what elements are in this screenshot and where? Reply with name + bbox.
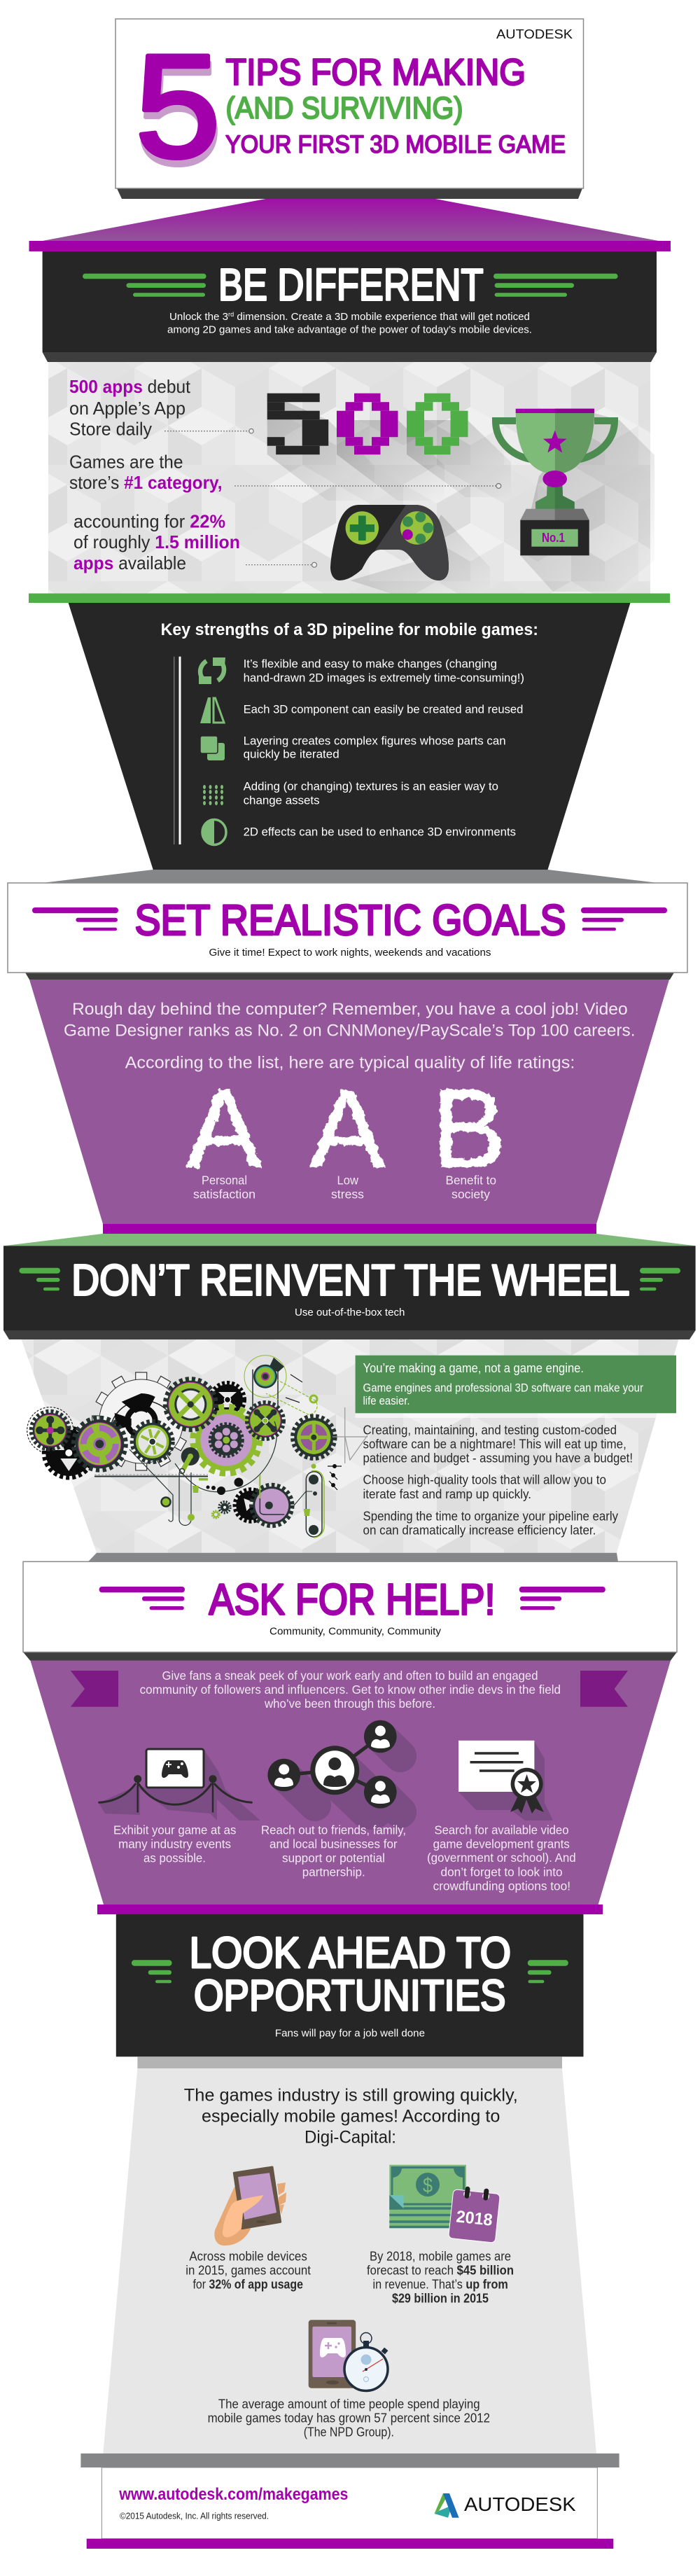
white header box [23,1561,677,1652]
text: reach out: Reach out to friends, family, [261,1823,406,1837]
outlined large gear [92,1372,190,1470]
text: reach out: partnership. [302,1865,365,1879]
crank [179,1447,200,1473]
logo: autodesk: AUTODESK [464,2493,576,2515]
dotted callout lines [164,429,501,567]
icon: hand holding phone [214,2167,286,2246]
dark funnel background [69,603,631,870]
header ledge [25,973,674,980]
intro text: community of followers and influencers. Get to know other indie devs in the field [140,1683,561,1697]
list item 5: 2D effects can be used to enhance 3D environments [244,825,516,838]
gray bar [80,2453,620,2467]
logo: autodesk [434,2493,576,2518]
intro text: dimension. Create a 3D mobile experience that will get noticed [234,311,530,323]
icon: texture dots [203,785,223,805]
heading stripes [132,1960,568,1983]
heading: Key strengths of a 3D pipeline for mobile games: [161,620,538,639]
icon: phone and stopwatch [309,2320,388,2390]
body text: on can dramatically increase efficiency later. [363,1524,596,1538]
panel: app store stats [48,362,654,594]
black gear lower left [44,1428,93,1477]
intro text [167,311,532,335]
text: app usage: in 2015, games account [186,2263,311,2277]
stats text: accounting for 22% [74,510,225,531]
patterned background [48,362,650,594]
purple bar [97,1905,603,1914]
text: grants: game development grants [433,1837,570,1851]
intro text: According to the list, here are typical quality of life ratings: [125,1053,575,1072]
icon: trophy: No.1 [542,531,565,545]
panel: footer [102,2467,597,2539]
icon: exhibit screen [99,1749,260,1820]
title line 3: YOUR FIRST 3D MOBILE GAME [225,130,566,158]
text: play time [208,2397,490,2439]
big lime gear [193,1407,259,1473]
list item 4 [244,780,498,807]
subheading: Use out-of-the-box tech [295,1307,405,1318]
list item 1 [244,657,524,684]
list item 3: quickly be iterated [244,748,340,761]
gear with flower [31,1412,69,1449]
panel: be different header [43,251,657,362]
gray connector [42,870,658,883]
panel: community [30,1661,671,1905]
rating: A personal satisfaction: A [186,1066,262,1191]
icon: layered squares [200,736,225,760]
intro text: rd [228,311,234,318]
panel: look ahead header [116,1914,584,2056]
digit 5 cells [267,394,328,454]
black gear bottom [234,1489,267,1522]
gear X spokes [165,1379,216,1430]
text: reach out [261,1823,406,1879]
text: app usage: for 32% of app usage [193,2277,303,2291]
body text: Choose high-quality tools that will allow you to [363,1473,606,1487]
text: play time: mobile games today has grown 57 percent since 2012 [208,2411,490,2425]
panel: title [115,19,584,199]
gear track details [161,1463,342,1535]
big number 5: 5 [135,24,220,188]
body text: patience and budget - assuming you have a budget! [363,1451,633,1465]
purple bar [29,241,671,251]
heading stripes [99,1587,606,1610]
stats text: on Apple’s App [69,398,186,419]
green bar [29,594,670,603]
list item 4: Adding (or changing) textures is an easier way to [244,780,498,793]
header ledge [4,1330,696,1339]
gear track lines [94,1407,368,1538]
icon: grant certificate [458,1741,553,1820]
body text: Spending the time to organize your pipeline early [363,1510,618,1524]
dark header box [43,251,657,352]
text: revenue: $29 billion in 2015 [392,2291,489,2305]
heading stripes [32,907,667,931]
text: grants [427,1823,576,1893]
text: play time: (The NPD Group). [304,2425,394,2439]
text: app usage: Across mobile devices [189,2249,307,2263]
intro text: Digi-Capital: [304,2128,396,2147]
gray strip [137,2056,562,2068]
text: revenue [367,2249,514,2305]
green connector [4,1234,696,1246]
purple funnel background [30,1661,671,1905]
intro text: Rough day behind the computer? Remember, you have a cool job! Video [72,1000,628,1019]
callout: green box: Game engines and professional 3D software can make your [363,1382,643,1395]
callout: green box [356,1356,676,1418]
ribbon left [71,1671,118,1707]
subheading: Community, Community, Community [270,1626,441,1638]
panel: set realistic goals header [8,883,687,980]
panel: ask for help header [23,1561,677,1661]
purple bar [103,1224,596,1234]
text: revenue: in revenue. That’s up from [372,2277,508,2291]
list item 1: hand-drawn 2D images is extremely time-consuming!) [244,671,524,684]
list item 4: change assets [244,793,320,807]
icon: refresh arrows [199,657,225,684]
digit 0 purple [337,394,398,454]
icon: money stack with calendar: $ [423,2174,433,2197]
title line 1: TIPS FOR MAKING [225,52,526,93]
website link text: www.autodesk.com/makegames [118,2485,348,2504]
text: revenue: forecast to reach $45 billion [367,2263,514,2277]
callout: green box: life easier. [363,1395,410,1407]
heading line 2: OPPORTUNITIES [194,1971,505,2020]
tiny gears [212,1502,230,1518]
icon: community network [267,1720,400,1812]
dark header box [116,1914,584,2056]
icon: game controller [330,505,449,580]
white header box [8,883,687,973]
rating: B benefit to society: society [451,1188,490,1202]
intro text: Give fans a sneak peek of your work early and often to build an engaged [162,1669,538,1683]
header ledge [43,352,657,362]
text: grants: crowdfunding options too! [433,1879,570,1893]
gear right [293,1416,335,1458]
black gear upper [211,1383,244,1416]
intro text: among 2D games and take advantage of the power of today’s mobile devices. [167,323,532,335]
icon: money stack with calendar: 2018 [455,2207,493,2230]
heading: ASK FOR HELP! [209,1575,496,1624]
heading stripes [83,274,618,297]
stats text: apps available [74,552,186,573]
light funnel background [103,2068,596,2453]
title line 2: (AND SURVIVING) [225,91,463,125]
body text: Creating, maintaining, and testing custom-coded [363,1423,617,1437]
icon: money stack with calendar [389,2165,500,2243]
panel: opportunities [103,2068,596,2453]
text: grants: Search for available video [434,1823,568,1837]
gray connector [88,1553,618,1562]
text: reach out: support or potential [282,1851,385,1865]
footer box [102,2467,597,2539]
heading line 1: LOOK AHEAD TO [189,1928,511,1977]
intro text: Game Designer ranks as No. 2 on CNNMoney/PayScale’s Top 100 careers. [64,1021,636,1040]
gear fan [247,1402,284,1439]
rating: A personal satisfaction: Personal [202,1174,247,1188]
list item 2: Each 3D component can easily be created and reused [244,702,523,716]
gear green spoked [132,1421,173,1462]
rating: A low stress: Low [337,1174,358,1188]
long shadows [267,394,654,594]
dashed link [266,1374,317,1414]
rating: A low stress: A [309,1066,385,1191]
text: revenue: By 2018, mobile games are [370,2249,511,2263]
list item 3 [244,734,506,761]
body text [363,1423,633,1538]
icon: mirrored triangles [200,697,224,723]
stats text: Games are the [69,451,183,472]
panel: don't reinvent the wheel header [4,1246,696,1339]
top wheel [244,1356,286,1408]
intro text: especially mobile games! According to [202,2107,500,2126]
rating: B benefit to society: Benefit to [445,1174,496,1188]
illustration: gears [27,1356,368,1538]
subheading: Fans will pay for a job well done [275,2027,425,2039]
purple funnel background [29,980,669,1224]
heading: BE DIFFERENT [218,259,483,309]
text: exhibit: as possible. [144,1851,206,1865]
heading stripes [19,1268,680,1290]
patterned funnel background [22,1339,678,1553]
panel: key strengths [69,603,631,870]
rating: A personal satisfaction: satisfaction [193,1188,255,1202]
stats text [69,376,240,573]
body text: software can be a nightmare! This will eat up time, [363,1437,626,1451]
stats text: store’s #1 category, [69,472,223,493]
intro text [64,1000,636,1072]
title box [115,19,584,188]
header ledge [23,1652,677,1661]
copyright: ©2015 Autodesk, Inc. All rights reserved. [120,2511,269,2521]
text: exhibit: Exhibit your game at as [113,1823,237,1837]
text: play time: The average amount of time people spend playing [218,2397,480,2411]
rating: A low stress: stress [331,1188,364,1202]
text: grants: don’t forget to look into [441,1865,563,1879]
stats text: 500 apps debut [69,376,191,397]
icon: trophy [496,409,615,555]
purple roof connector [43,199,659,241]
stats text: Store daily [69,419,152,440]
rating: B benefit to society: B [432,1066,506,1191]
list item 1: It’s flexible and easy to make changes (changing [244,657,497,670]
autodesk wordmark: AUTODESK [496,27,573,41]
intro text: Unlock the 3 [169,311,227,323]
text: app usage [186,2249,311,2291]
intro text [140,1669,561,1711]
body text: iterate fast and ramp up quickly. [363,1487,531,1501]
intro text: who’ve been through this before. [264,1697,435,1711]
text: exhibit [113,1823,237,1865]
intro text: The games industry is still growing quickly, [184,2086,518,2105]
title box ledge [117,188,582,199]
stats text: of roughly 1.5 million [74,531,240,552]
gear with lilac arcs [74,1418,125,1470]
lilac gear bottom [251,1475,292,1526]
list rule [174,657,181,844]
list item 3: Layering creates complex figures whose parts can [244,734,506,747]
digit 0 green [407,394,468,454]
panel: career ratings [29,980,669,1224]
callout: green box: You’re making a game, not a game engine. [363,1361,584,1375]
heading: SET REALISTIC GOALS [134,896,566,945]
intro text [184,2086,518,2147]
text: exhibit: many industry events [118,1837,231,1851]
dark header box [4,1246,696,1330]
icon: half circle [202,819,226,844]
ribbon right [580,1671,628,1707]
pixel number 500 [267,394,468,454]
dashed orbit left [27,1407,74,1454]
purple bar [87,2539,613,2549]
heading: DON’T REINVENT THE WHEEL [71,1256,630,1305]
text: grants: (government or school). And [427,1851,576,1865]
panel: tools [22,1339,678,1553]
subheading: Give it time! Expect to work nights, weekends and vacations [209,947,491,959]
text: reach out: and local businesses for [270,1837,398,1851]
